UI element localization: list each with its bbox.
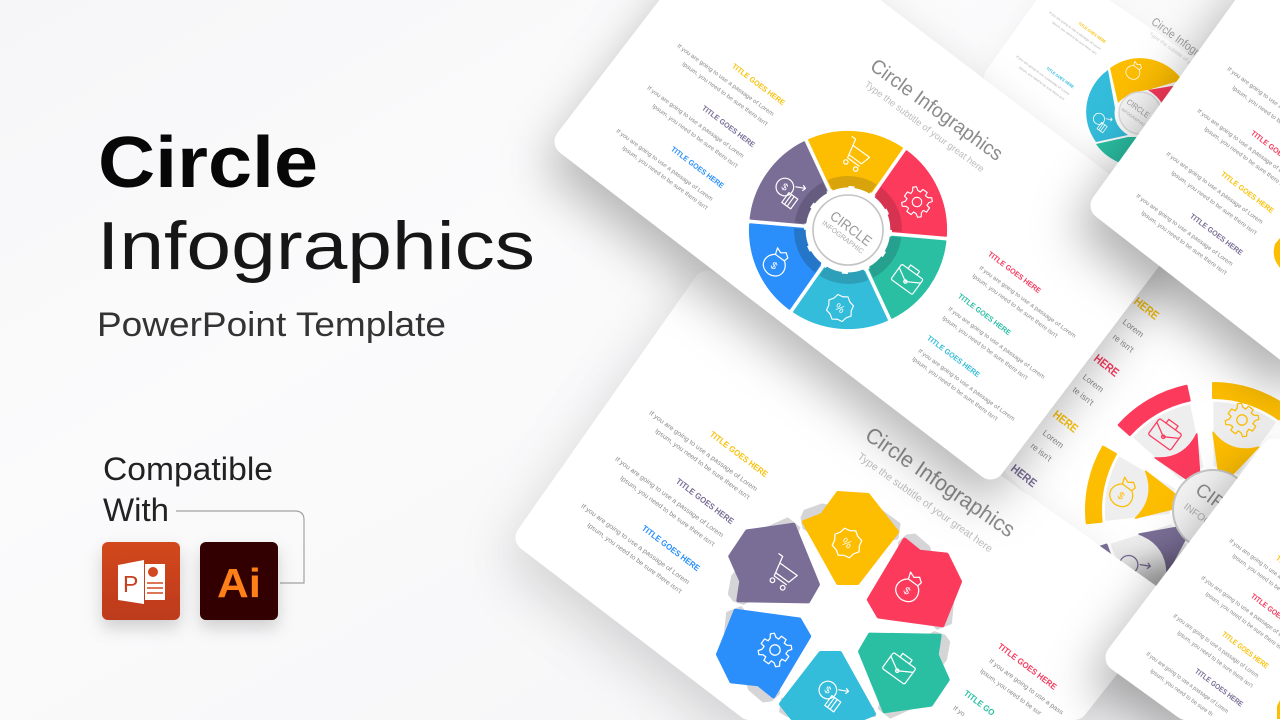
- text block: green: TITLE GO: [962, 688, 997, 718]
- text block: yellow: TITLE GOES HERE: [1220, 630, 1270, 670]
- text blocks: small slide: Ipsum, you need to be sure there isn't: [1051, 21, 1098, 56]
- icon: money bag: $: [901, 585, 912, 598]
- text block: red: If you are going to use a pass: [987, 658, 1065, 717]
- text block: purple: If you are going to use a passage of Lorem: [613, 456, 725, 539]
- icon: Illustrator: [200, 542, 278, 620]
- icon: coin: [812, 675, 849, 712]
- panel: bottom right slide: [1120, 453, 1280, 719]
- text block: yellow: Ipsum, you need to be sure there isn't: [1176, 630, 1254, 690]
- text block: yellow: If you are going to use a passage of Lorem: [1172, 613, 1259, 679]
- text block: cyan: If you are going to use a passage of Lorem: [917, 348, 1016, 423]
- text: small slide subtitle: Type the subtitle of your: [1148, 31, 1199, 70]
- segment: yellow: [805, 128, 903, 196]
- text block: purple: If you are going to use a passage of Lorem: [646, 85, 745, 160]
- icon: PowerPoint: [102, 542, 180, 620]
- panel: right middle slide: [1008, 225, 1280, 700]
- icon: coin: [769, 172, 806, 209]
- icon: gear: [1221, 399, 1263, 441]
- text block: purple: TITLE GOES HERE: [700, 104, 757, 149]
- text block: purple: Ipsum, you need to be sure th: [1149, 668, 1214, 718]
- segment: cyan: [793, 264, 891, 332]
- icon: briefcase: [1148, 415, 1185, 450]
- text block: green: If yo: [951, 705, 966, 718]
- icon: money bag: [892, 569, 927, 606]
- text block: purple: If you are going to use a passage of Lorem: [1135, 193, 1234, 268]
- text: clipped labels: re isn't: [1029, 441, 1054, 464]
- text block: purple: Ipsum, you need to be sure there isn't: [618, 475, 716, 548]
- text block: purple: Ipsum, you need to be sure there isn't: [1140, 210, 1228, 277]
- segment: purple: [741, 136, 844, 246]
- segment: blue: [739, 204, 833, 314]
- icon: briefcase: [891, 260, 926, 295]
- segment: purple: [712, 504, 839, 633]
- chart: small circle wheel: CIRCLE: [1125, 97, 1151, 120]
- center gear: INFOGRAPHIC: [820, 220, 865, 256]
- icon: coin: $: [822, 685, 833, 697]
- text: slide subtitle: Type the subtitle of your great here: [862, 79, 986, 175]
- text blocks: small slide: TITLE GOES HERE: [1045, 66, 1075, 89]
- center gear: [806, 188, 890, 272]
- icon: gear: [754, 629, 796, 671]
- text block: red: If you are going to use a passage of Lorem: [978, 265, 1077, 340]
- text: clipped labels: HERE: [1091, 351, 1122, 380]
- text block: cyan: Ipsum, you need to be sure there isn't: [911, 356, 999, 423]
- text: clipped labels: HERE: [1008, 461, 1040, 490]
- center gear: CIRCLE: [827, 208, 875, 249]
- chart: small circle wheel: INFOGRAPHIC: [1120, 107, 1146, 127]
- text: clipped labels: Lorem: [1121, 317, 1146, 339]
- icon: PowerPoint: P: [123, 571, 138, 597]
- chart: segmented wheel: [1081, 377, 1280, 616]
- text block: blue: Ipsum, you need to be sure there isn't: [621, 145, 709, 212]
- chart: segmented wheel: INFOGRAPHIC: [1181, 501, 1244, 551]
- icon: percent badge: [826, 522, 868, 564]
- icon: money bag: $: [1115, 490, 1126, 503]
- panel: top slide: [569, 0, 1165, 465]
- text: Compatible With: Compatible: [103, 451, 273, 487]
- segment: red: [851, 523, 977, 652]
- segment: red: [863, 146, 957, 256]
- panel: bottom slide: [530, 285, 1155, 720]
- text block: yellow: TITLE GOES HERE: [1219, 170, 1276, 215]
- subtitle: PowerPoint Template: PowerPoint Template: [97, 306, 446, 344]
- text block: purple: TITLE GOES HERE: [1193, 667, 1245, 709]
- heading: slide title: Circle Infographics: [866, 55, 1007, 166]
- segment: yellow: [802, 493, 899, 583]
- text blocks: small slide: TITLE GOES HERE: [1077, 21, 1107, 44]
- chart: segmented wheel: [739, 128, 957, 332]
- panel: top right slide: [1105, 0, 1280, 355]
- text block: yellow: If you are going to use a passage of Lorem: [1165, 151, 1264, 226]
- text block: red: TITLE GOES HERE: [996, 641, 1059, 692]
- title: Infographics: Infographics: [97, 208, 535, 284]
- text block: green: TITLE GOES HERE: [956, 292, 1013, 337]
- text: clipped labels: [1008, 294, 1162, 490]
- text: clipped labels: Lorem: [1081, 372, 1106, 394]
- text block: yellow: TITLE GOES HERE: [730, 62, 787, 107]
- text block: blue: TITLE GOES HERE: [640, 523, 702, 573]
- text: slide subtitle: Type the subtitle of your great here: [855, 451, 995, 555]
- icon: money bag: [1106, 474, 1141, 511]
- text block: purple: Ipsum, you need to be sure there isn't: [651, 103, 739, 170]
- text block: red: Ipsum, you need to be sur: [978, 668, 1043, 717]
- text: clipped labels: te isn't: [1071, 385, 1096, 408]
- text: clipped labels: HERE: [1050, 407, 1081, 436]
- icon: Illustrator: Ai: [217, 560, 261, 606]
- text block: red: TITLE GOES HERE: [986, 250, 1043, 295]
- text blocks: small slide: If you are going to use a passage of Lorem: [1015, 55, 1071, 96]
- icon: gear: [898, 183, 936, 221]
- text block: yellow: Ipsum, you need to be sure there isn't: [681, 61, 769, 128]
- text blocks: small slide: If you are going to use a passage of Lorem: [1048, 11, 1102, 51]
- text block: yellow: If you are going to use a passage of Lorem: [647, 410, 759, 493]
- text: Compatible With: [103, 451, 273, 528]
- segment: green: [839, 603, 966, 720]
- text block: blue: If you are going to use a passage of Lorem: [615, 128, 714, 203]
- chart: yellow segment edge: [1274, 238, 1280, 268]
- text block: purple: TITLE GOES HERE: [1188, 212, 1245, 257]
- icon: briefcase: [882, 649, 919, 684]
- icon: percent badge: %: [832, 301, 847, 316]
- icon: coin: $: [779, 182, 790, 194]
- segment: cyan: [779, 653, 876, 718]
- icon: money bag: $: [768, 260, 779, 273]
- panel: small back slide: [998, 0, 1280, 340]
- segment: green: [852, 214, 955, 324]
- chart: petal wheel: [701, 493, 977, 720]
- chart: segmented wheel: CIRCLE: [1191, 479, 1260, 537]
- text block: green: Ipsum, you need to be sure there isn't: [941, 315, 1029, 382]
- icon: coin: [1112, 549, 1151, 588]
- text blocks: small slide: Ipsum, you need to be sure there isn't: [1018, 66, 1065, 101]
- icon: cart: [837, 137, 873, 173]
- text block: purple: TITLE GOES HERE: [674, 476, 736, 526]
- heading: small slide title: Circle Infogr: [1149, 14, 1202, 59]
- connector line: [176, 511, 304, 583]
- text block: yellow: Ipsum, you need to be sure there isn't: [1170, 170, 1258, 237]
- text block: yellow: Ipsum, you need to be sure there isn't: [653, 428, 751, 501]
- text block: yellow: TITLE GOES HERE: [708, 429, 770, 479]
- chart: small circle wheel: [1086, 58, 1182, 163]
- title: Circle: Circle: [98, 123, 318, 203]
- text blocks: small slide: [1015, 11, 1107, 101]
- text block: yellow: If you are going to use a passage of Lorem: [676, 43, 775, 118]
- text block: red: Ipsum, you need to be sure there isn't: [971, 273, 1059, 340]
- icon: cart: [763, 554, 801, 592]
- text block: green: If you are going to use a passage of Lorem: [947, 306, 1046, 381]
- icon: money bag: [759, 245, 793, 280]
- text: clipped labels: HERE: [1131, 294, 1162, 323]
- icon: percent badge: %: [839, 536, 854, 552]
- text block: cyan: TITLE GOES HERE: [925, 334, 982, 379]
- heading: slide title: Circle Infographics: [861, 422, 1020, 542]
- text block: red: [978, 641, 1065, 717]
- text block: blue: Ipsum, you need to be sure there isn't: [585, 522, 683, 595]
- segment: blue: [701, 584, 827, 713]
- text block: blue: TITLE GOES HERE: [669, 145, 726, 190]
- text: Compatible With: With: [103, 492, 169, 528]
- text: clipped labels: re isn't: [1111, 332, 1136, 355]
- text block: blue: If you are going to use a passage of Lorem: [579, 503, 691, 586]
- chart: yellow segment edge: [1277, 700, 1280, 719]
- shadow pool near lower edge: [1119, 561, 1211, 609]
- icon: percent badge: [821, 289, 859, 327]
- text: clipped labels: Lorem: [1041, 428, 1066, 450]
